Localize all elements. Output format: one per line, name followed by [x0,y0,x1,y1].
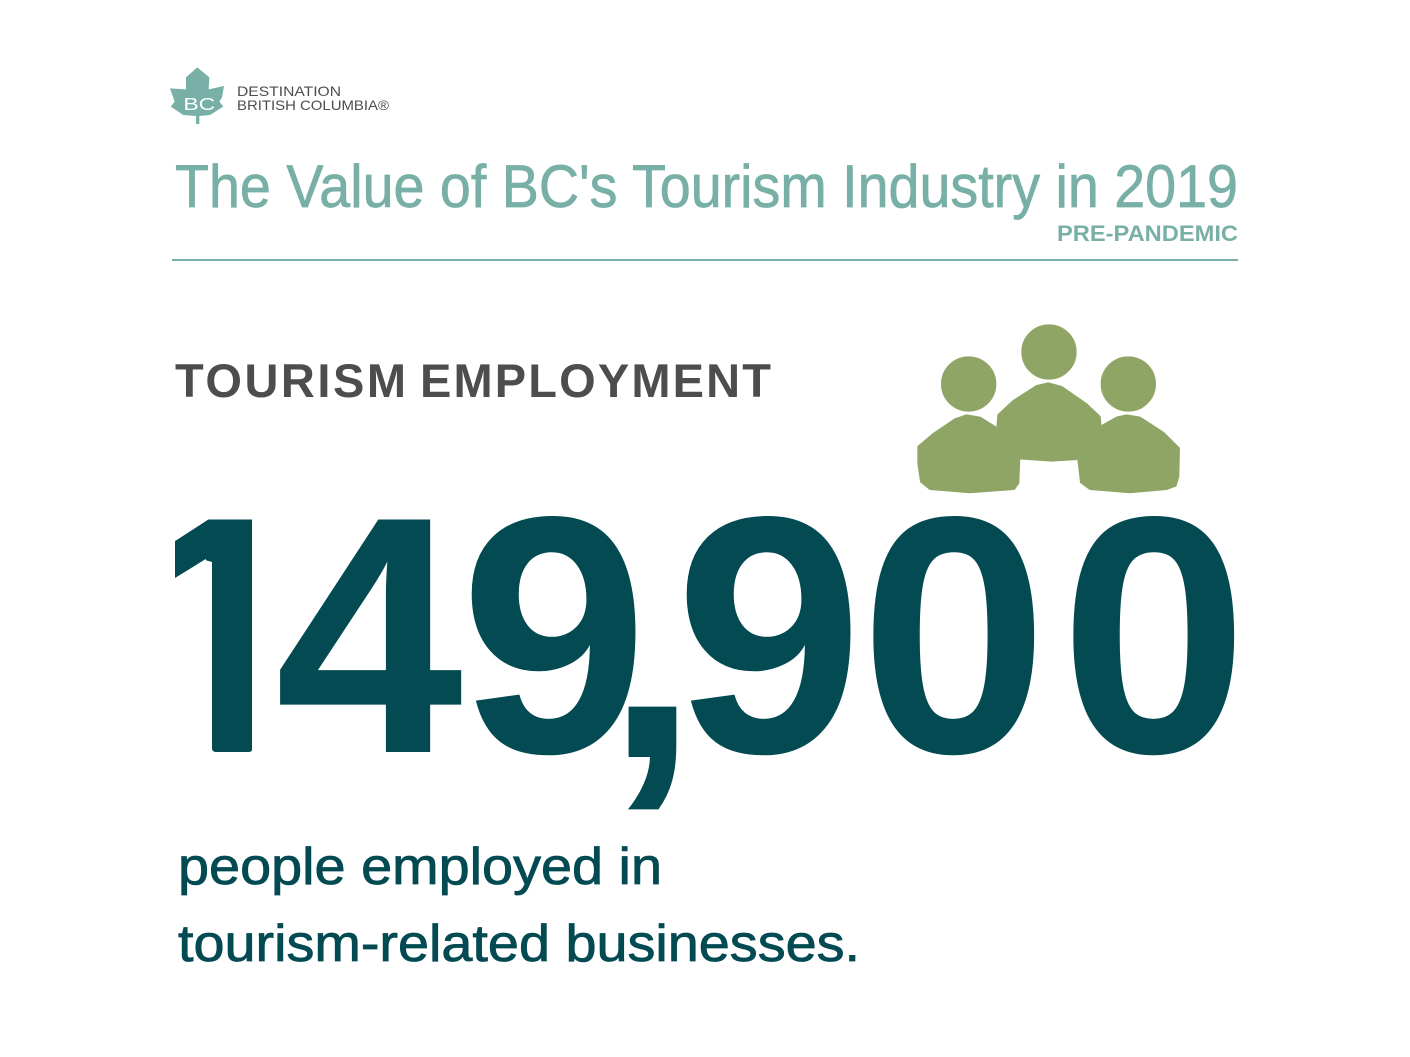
description [178,838,860,973]
section heading: EMPLOYMENT [420,354,771,407]
big number: 149,900 [127,446,1248,829]
logo: Destination British Columbia [170,67,390,124]
logo wordmark: BRITISH COLUMBIA® [237,97,390,113]
icon: three people [918,325,1179,492]
description: people employed in [178,838,662,896]
subtitle: pre-pandemic: PRE-PANDEMIC [1057,221,1238,246]
logo wordmark: DESTINATION [237,83,341,99]
title: The Value of BC's Tourism Industry in 2019 [175,153,1238,220]
section heading: TOURISM [175,354,406,407]
icon: maple leaf with BC: BC [183,94,215,114]
logo wordmark [237,83,390,113]
description: tourism-related businesses. [178,915,860,973]
icon: maple leaf with BC [170,67,224,124]
infographic canvas [170,67,1238,962]
section heading [175,354,771,407]
title rule [172,259,1238,261]
